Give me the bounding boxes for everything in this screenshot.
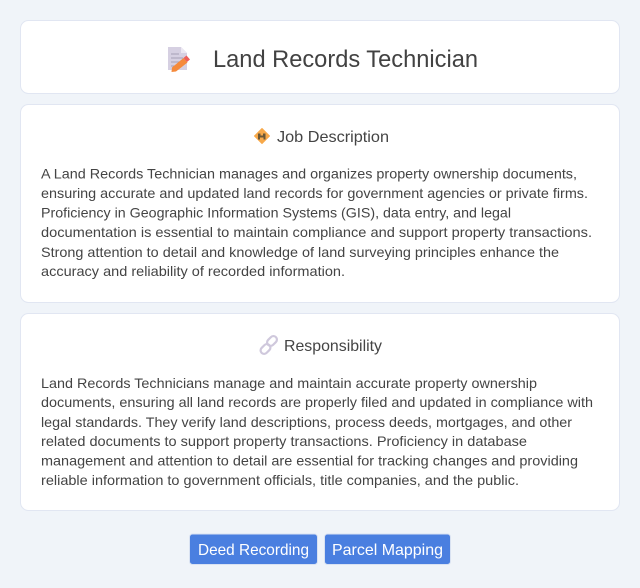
panel: responsibility bbox=[20, 314, 620, 510]
text block: job description: A Land Records Technician manages and organizes property ownership documents, bbox=[41, 166, 577, 182]
icon: orange diamond bbox=[254, 128, 270, 144]
title: Land Records Technician bbox=[213, 46, 478, 73]
text block: job description: Strong attention to detail and knowledge of land surveying principles enhance the bbox=[41, 244, 559, 260]
text block: job description bbox=[41, 166, 592, 279]
text block: responsibility: reliable information to government officials, title companies, and the public. bbox=[41, 472, 519, 488]
panel: job description bbox=[20, 104, 620, 302]
text block: responsibility: legal standards. They verify land descriptions, process deeds, mortgages, and other bbox=[41, 414, 572, 430]
text block: job description: documentation is essential to maintain compliance and support property transactions. bbox=[41, 224, 592, 240]
text block: responsibility: related documents to support property transactions. Proficiency in database bbox=[41, 433, 527, 449]
text block: responsibility: management and attention to detail are essential for tracking changes and providing bbox=[41, 452, 578, 468]
text block: responsibility bbox=[41, 375, 593, 488]
text block: job description: ensuring accurate and updated land records for government agencies or private firms. bbox=[41, 185, 588, 201]
text block: responsibility: Land Records Technicians manage and maintain accurate property ownership bbox=[41, 375, 537, 391]
tag: Deed Recording bbox=[190, 534, 318, 564]
text block: job description: Proficiency in Geographic Information Systems (GIS), data entry, and legal bbox=[41, 204, 511, 220]
panel: title header bbox=[20, 20, 620, 94]
heading: responsibility: Responsibility bbox=[284, 338, 382, 355]
tag: Parcel Mapping: Parcel Mapping bbox=[332, 542, 443, 559]
tag: Deed Recording: Deed Recording bbox=[198, 542, 309, 559]
icon: document with pencil bbox=[168, 47, 190, 72]
text block: responsibility: documents, ensuring all land records are properly filed and updated in compliance with bbox=[41, 394, 593, 410]
icon: chain link bbox=[259, 335, 278, 355]
tag: Parcel Mapping bbox=[324, 534, 450, 564]
heading: job description: Job Description bbox=[277, 129, 389, 146]
text block: job description: accuracy and reliability of recorded information. bbox=[41, 263, 345, 279]
